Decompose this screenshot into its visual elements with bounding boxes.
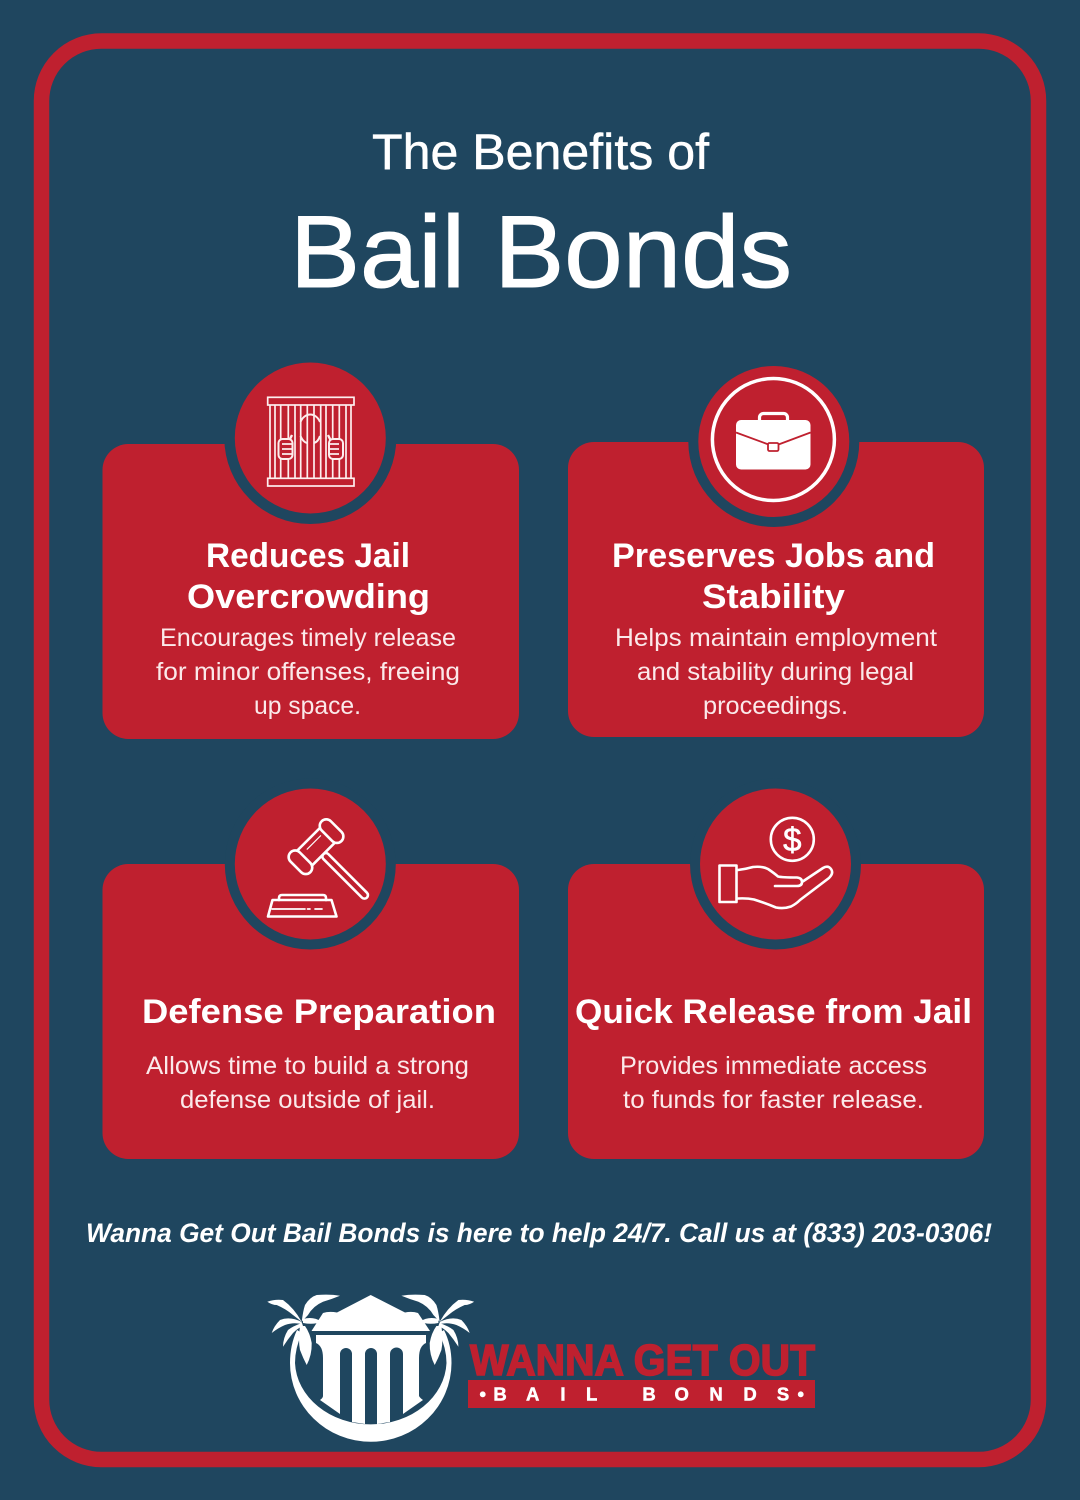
body text: for minor offenses, freeing	[156, 658, 460, 686]
title	[290, 124, 792, 309]
palm fronds, right	[401, 1295, 474, 1365]
palm fronds, left	[267, 1295, 340, 1365]
heading: Reduces Jail	[206, 537, 410, 575]
heading line 2: Overcrowding	[187, 578, 430, 616]
body text: to funds for faster release.	[623, 1086, 924, 1114]
body text: Allows time to build a strong	[146, 1052, 469, 1080]
body text: up space.	[254, 692, 361, 720]
panel: quick release from jail	[568, 778, 984, 1159]
body text: and stability during legal	[637, 658, 914, 686]
icon: courthouse with palm trees	[267, 1295, 474, 1442]
heading: Quick Release from Jail	[575, 993, 972, 1031]
body text: defense outside of jail.	[180, 1086, 435, 1114]
body text: Helps maintain employment	[615, 624, 937, 652]
icon: hand holding coin: $	[783, 821, 801, 858]
body text	[156, 624, 460, 720]
body text: Encourages timely release	[160, 624, 456, 652]
title: Bail Bonds	[290, 195, 792, 309]
panel: reduces jail overcrowding	[102, 340, 519, 739]
panel: defense preparation	[102, 778, 519, 1159]
icon: briefcase	[712, 378, 834, 500]
wordmark bar	[468, 1380, 815, 1408]
heading line 2: Stability	[702, 578, 845, 616]
icon: jail bars with hands	[268, 397, 354, 486]
heading: Preserves Jobs and	[612, 537, 935, 575]
call to action: Wanna Get Out Bail Bonds is here to help 24/7. Call us at (833) 203-0306!	[86, 1218, 992, 1248]
body text: Provides immediate access	[620, 1052, 927, 1080]
title: The Benefits of	[372, 124, 709, 180]
panel: preserves jobs and stability	[568, 340, 984, 737]
wordmark: WANNA GET OUT	[470, 1336, 815, 1385]
body text	[146, 1052, 469, 1114]
body text	[615, 624, 937, 720]
icon: gavel	[268, 817, 387, 918]
icon: hand holding coin	[720, 818, 832, 908]
heading: Defense Preparation	[142, 993, 496, 1031]
body text	[620, 1052, 927, 1114]
logo	[267, 1295, 815, 1442]
body text: proceedings.	[703, 692, 848, 720]
wordmark subtitle: •BAIL BONDS•	[479, 1384, 804, 1405]
